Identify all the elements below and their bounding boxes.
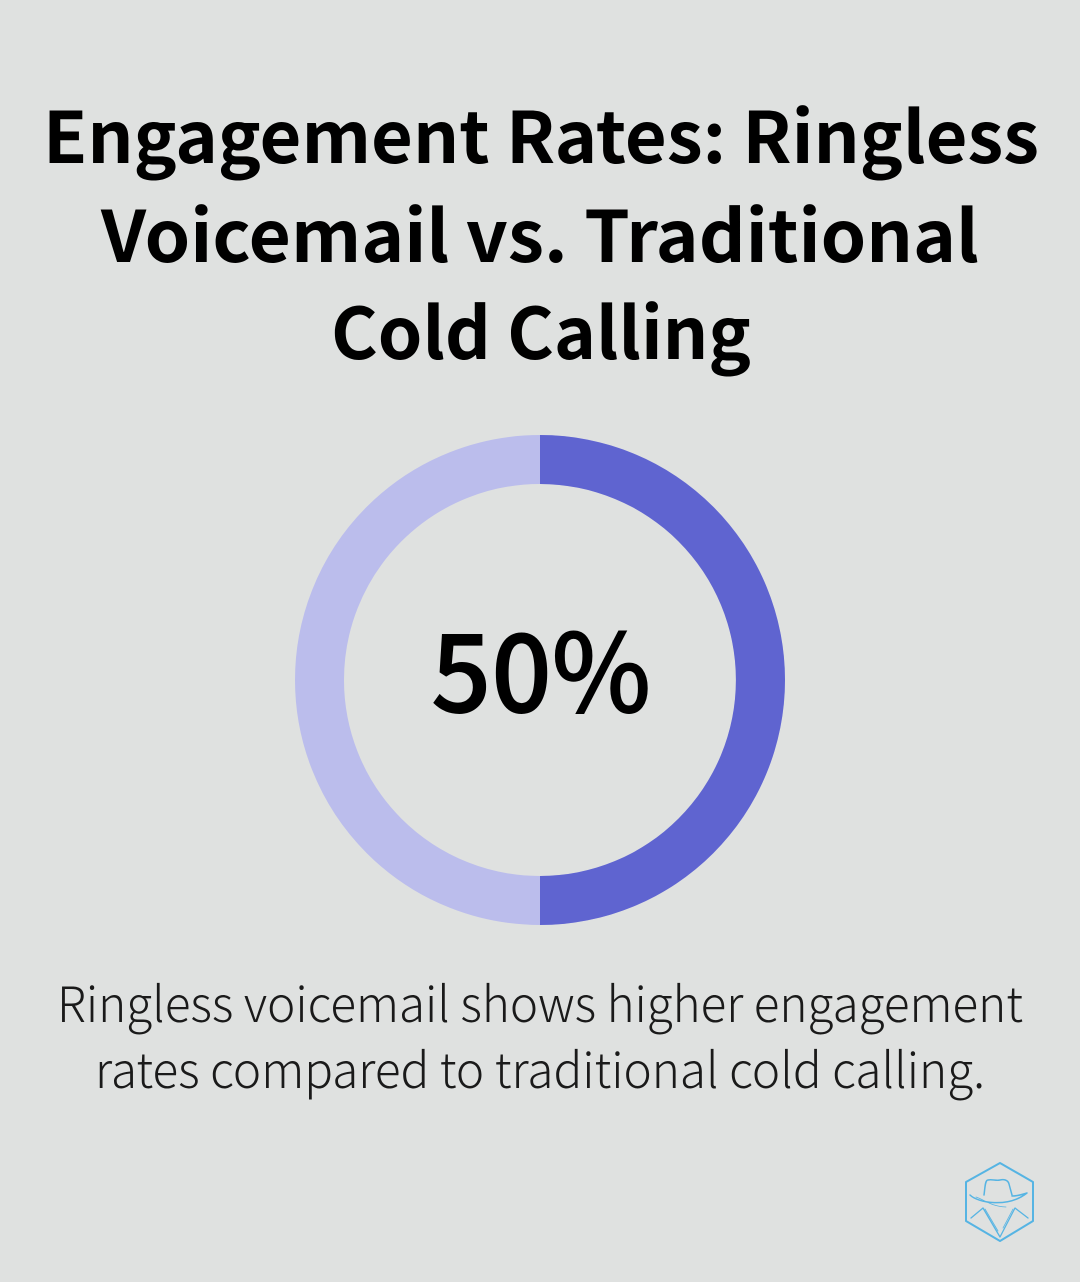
title: Voicemail vs. Traditional xyxy=(100,181,979,283)
description: rates compared to traditional cold calling. xyxy=(95,1032,985,1103)
title: Engagement Rates: Ringless xyxy=(43,82,1039,184)
description: Ringless voicemail shows higher engagement xyxy=(57,966,1023,1037)
icon: hexagon spy logo xyxy=(966,1163,1033,1241)
title xyxy=(43,82,1039,380)
donut value: 50% xyxy=(431,588,651,744)
donut chart xyxy=(320,435,785,925)
title: Cold Calling xyxy=(331,278,751,380)
description xyxy=(57,966,1023,1103)
